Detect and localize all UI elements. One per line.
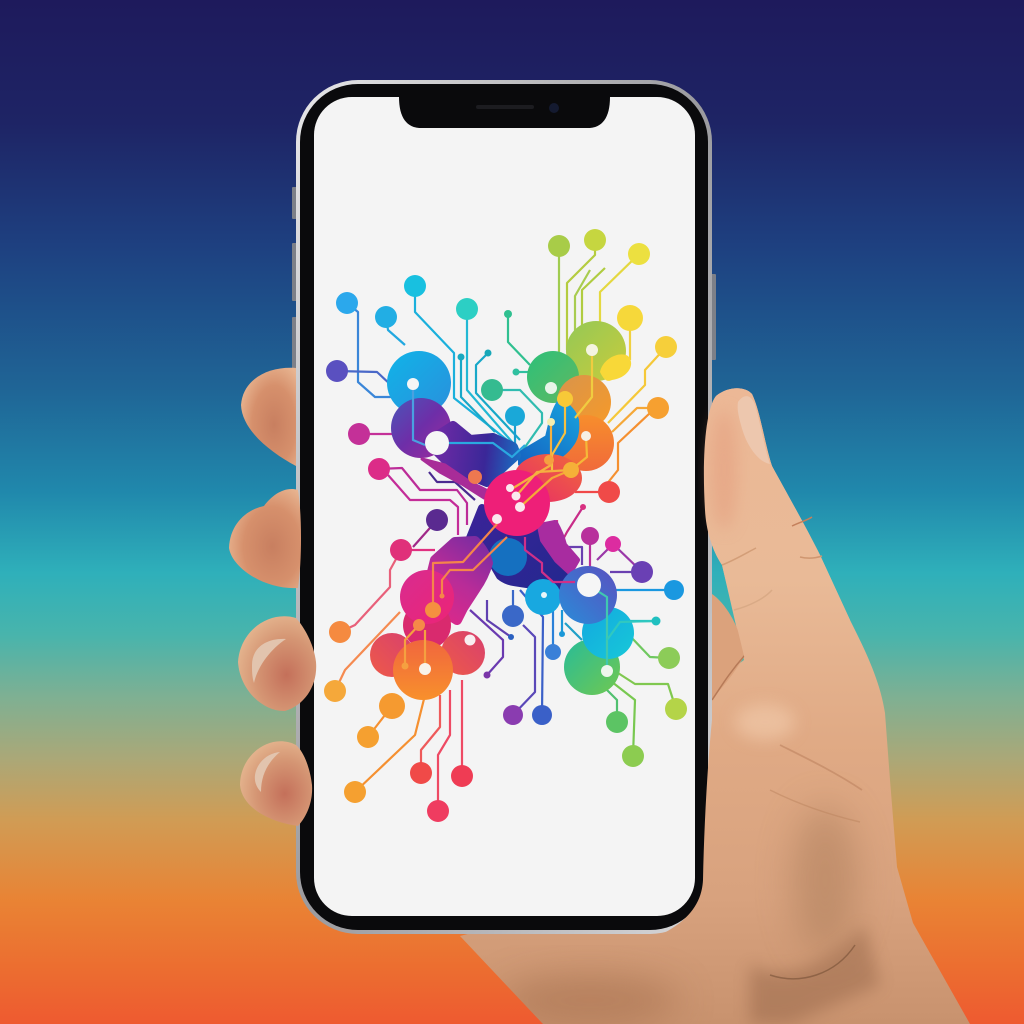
hand: fingers over phone edge xyxy=(229,368,316,826)
hand: palm behind phone xyxy=(460,388,970,1024)
blob: lower centre indigo xyxy=(468,508,577,615)
finger 1 xyxy=(241,368,296,466)
finger 2 xyxy=(229,489,301,588)
circuit network artwork xyxy=(324,229,687,822)
black bezel xyxy=(300,84,708,930)
smartphone xyxy=(292,80,716,934)
blob: top right green orange xyxy=(514,321,631,502)
palm creases xyxy=(780,745,862,790)
screen xyxy=(314,97,695,916)
blob: lower right blue xyxy=(559,566,634,695)
lower finger behind thumb xyxy=(705,590,745,705)
blob: pink centre xyxy=(484,470,550,536)
palm shading xyxy=(793,805,857,955)
hand: thumb over phone edge xyxy=(704,388,850,680)
finger 4 xyxy=(240,741,312,826)
thumb pink shading xyxy=(711,410,737,530)
blob: lower left pink orange xyxy=(370,541,488,700)
side buttons xyxy=(292,187,716,372)
finger 3 xyxy=(238,616,316,711)
white and accent dots on blobs xyxy=(402,344,613,677)
speaker xyxy=(476,105,534,109)
knuckle creases xyxy=(792,517,812,526)
traces on top of blobs xyxy=(405,350,656,671)
terminal nodes xyxy=(324,229,687,822)
traces behind blobs xyxy=(335,240,676,811)
hand: skin overlapping the lower right phone edge xyxy=(500,704,880,1024)
notch xyxy=(399,97,610,128)
thumb nail xyxy=(738,396,770,464)
blob: top left blue purple xyxy=(387,351,516,498)
fingernail 3 xyxy=(252,639,286,683)
phone frame xyxy=(296,80,712,934)
camera xyxy=(549,103,559,113)
fingernail 4 xyxy=(255,752,280,792)
